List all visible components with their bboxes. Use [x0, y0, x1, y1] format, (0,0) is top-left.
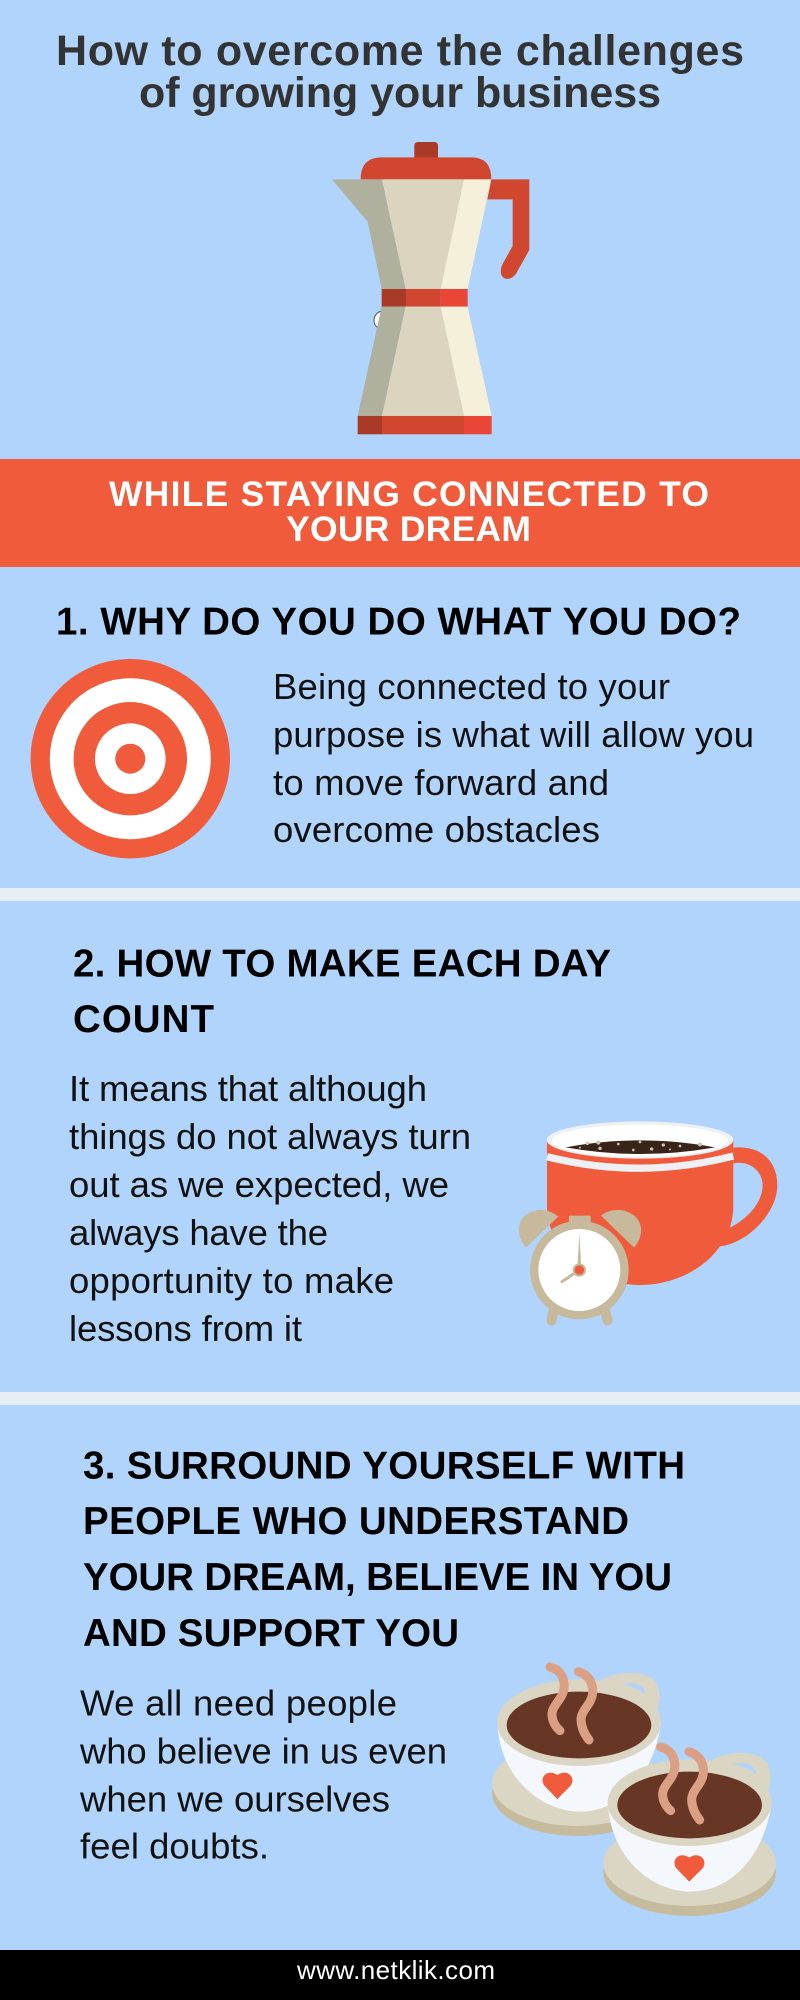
- icon: moka coffee pot: [332, 142, 529, 434]
- text block: section 3: feel doubts.: [80, 1826, 269, 1866]
- text block: section 1: [273, 666, 754, 850]
- footer bar: [0, 1950, 800, 2000]
- heading: section 2: 2. HOW TO MAKE EACH DAY: [73, 942, 611, 986]
- text block: section 1: Being connected to your: [273, 666, 670, 707]
- heading: section 3: [83, 1444, 685, 1655]
- text block: section 3: We all need people: [80, 1682, 397, 1724]
- text block: section 2: things do not always turn: [69, 1116, 471, 1157]
- banner: YOUR DREAM: [286, 509, 531, 549]
- banner: WHILE STAYING CONNECTED TO: [109, 474, 709, 514]
- text block: section 2: out as we expected, we: [69, 1164, 449, 1205]
- footer bar: www.netklik.com: [296, 1955, 495, 1985]
- text block: section 2: always have the: [69, 1212, 328, 1253]
- heading: section 3: 3. SURROUND YOURSELF WITH: [83, 1444, 685, 1488]
- text block: section 3: [79, 1682, 447, 1866]
- banner: [0, 459, 800, 567]
- heading: section 2: [73, 942, 611, 1041]
- text block: section 2: lessons from it: [69, 1308, 302, 1349]
- heading: section 3: YOUR DREAM, BELIEVE IN YOU: [83, 1556, 672, 1599]
- heading: section 1: 1. WHY DO YOU DO WHAT YOU DO?: [56, 600, 741, 644]
- cup: back: [492, 1667, 661, 1836]
- text block: section 2: It means that although: [69, 1068, 427, 1109]
- text block: section 2: [69, 1068, 471, 1349]
- title: How to overcome the challenges: [56, 27, 744, 75]
- icon: target: [31, 659, 230, 858]
- panel: section 3: [79, 1444, 776, 1916]
- icon: red mug with alarm clock: [519, 1121, 777, 1321]
- cup: front: [603, 1747, 776, 1916]
- text block: section 3: when we ourselves: [79, 1778, 390, 1820]
- text block: section 3: who believe in us even: [79, 1730, 447, 1772]
- icon: two coffee cups with hearts: [492, 1667, 776, 1916]
- panel: section 1: [31, 600, 754, 858]
- text block: section 1: purpose is what will allow you: [273, 714, 754, 755]
- title: of growing your business: [139, 69, 661, 117]
- text block: section 1: to move forward and: [273, 762, 609, 803]
- heading: section 3: AND SUPPORT YOU: [83, 1612, 459, 1655]
- title: [56, 27, 744, 117]
- text block: section 2: opportunity to make: [69, 1260, 394, 1301]
- heading: section 2: COUNT: [73, 998, 214, 1041]
- panel: section 2: [69, 942, 777, 1349]
- text block: section 1: overcome obstacles: [273, 809, 600, 850]
- heading: section 3: PEOPLE WHO UNDERSTAND: [83, 1500, 629, 1543]
